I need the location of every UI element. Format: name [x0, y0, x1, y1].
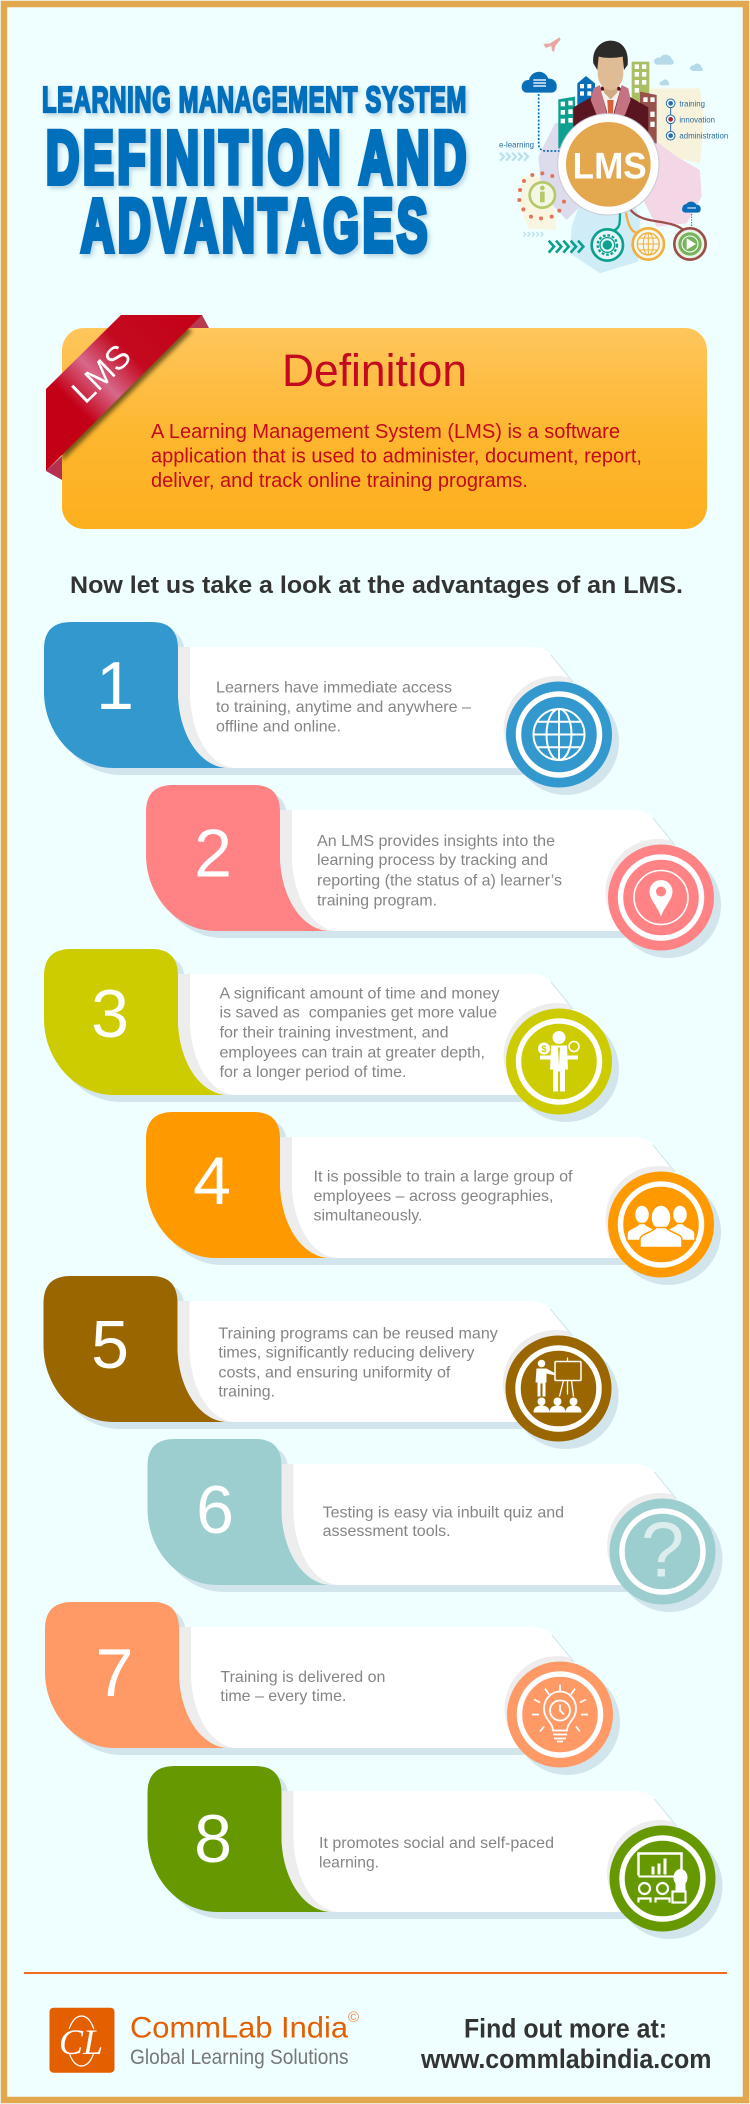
- text: [218, 1325, 498, 1401]
- card shape: [44, 622, 574, 775]
- number: 1: [96, 648, 134, 724]
- text: [323, 1504, 564, 1540]
- card shape: [148, 1439, 677, 1592]
- text: A significant amount of time and money: [220, 985, 500, 1002]
- card shape: [146, 1112, 676, 1265]
- panel: advantage 7: [45, 1602, 620, 1775]
- number: 3: [91, 976, 129, 1052]
- number: 2: [194, 816, 232, 892]
- call to action: Find out more at:: [464, 2014, 667, 2044]
- LMS badge: LMS: [573, 144, 647, 186]
- panel: advantage 6: [148, 1439, 722, 1612]
- number: 4: [193, 1143, 231, 1219]
- text: learning process by tracking and: [317, 852, 548, 869]
- card shape: [44, 949, 574, 1102]
- text: reporting (the status of a) learner’s: [317, 872, 562, 889]
- number: 7: [96, 1635, 134, 1711]
- footer divider: [24, 1972, 727, 1974]
- text: assessment tools.: [323, 1523, 451, 1540]
- icon: airplane: [543, 37, 561, 52]
- watercolor backdrop: [520, 88, 704, 273]
- panel: advantage 1: [44, 622, 619, 795]
- copyright: ©: [348, 2009, 359, 2026]
- logo mark: [50, 2008, 114, 2073]
- definition text: A Learning Management System (LMS) is a software: [151, 421, 620, 443]
- text: [216, 680, 471, 736]
- text: employees – across geographies,: [314, 1188, 554, 1205]
- text: costs, and ensuring uniformity of: [218, 1364, 451, 1381]
- icon: info with dotted ring: [517, 171, 566, 220]
- text: training.: [218, 1384, 275, 1401]
- buildings: [558, 62, 657, 148]
- icon: globe: [506, 682, 619, 795]
- panel: definition: [46, 315, 707, 529]
- text: to training, anytime and anywhere –: [216, 699, 471, 716]
- text: [314, 1169, 573, 1225]
- chevrons: [523, 232, 583, 253]
- connectors: [613, 210, 683, 233]
- LMS badge: [558, 114, 659, 215]
- title: DEFINITION AND: [46, 116, 470, 199]
- logo mark: CL: [59, 2022, 103, 2062]
- icon: gear circle: [592, 229, 623, 261]
- logo: CommLab India: [50, 2008, 359, 2073]
- list: training, innovation, administration: training: [679, 100, 705, 109]
- icon: globe circle: [633, 228, 664, 260]
- text: time – every time.: [220, 1688, 346, 1705]
- number: 6: [196, 1472, 234, 1548]
- number: 8: [194, 1801, 232, 1877]
- title: [42, 79, 470, 267]
- list: training, innovation, administration: innovation: [679, 115, 715, 124]
- icon: location pin: [608, 844, 721, 958]
- text: Learners have immediate access: [216, 680, 452, 697]
- icon: businessman balancing money and time: $: [541, 1044, 547, 1054]
- text: offline and online.: [216, 719, 341, 736]
- text: [319, 1835, 554, 1871]
- call to action: www.commlabindia.com: [420, 2044, 712, 2074]
- text: simultaneously.: [314, 1208, 422, 1225]
- icon: classroom with chart: [610, 1826, 722, 1939]
- text: An LMS provides insights into the: [317, 833, 555, 850]
- text: employees can train at greater depth,: [220, 1044, 485, 1061]
- text: Testing is easy via inbuilt quiz and: [323, 1504, 564, 1521]
- title: LEARNING MANAGEMENT SYSTEM: [42, 79, 467, 120]
- definition text: [151, 421, 642, 492]
- label: e-learning: e-learning: [499, 140, 534, 149]
- heading: Definition: [282, 345, 467, 396]
- tagline: Global Learning Solutions: [130, 2046, 348, 2069]
- panel: advantage 3: [44, 949, 619, 1122]
- panel: advantage 8: [148, 1766, 722, 1939]
- icon: play circle: [674, 228, 706, 260]
- ribbon shadow: [62, 326, 192, 461]
- panel: advantage 2: [146, 785, 721, 958]
- text: learning.: [319, 1854, 379, 1871]
- icon: light bulb with clock: [507, 1662, 620, 1775]
- card shape: [45, 1602, 574, 1755]
- hero illustration: LMS hub: [499, 37, 728, 273]
- definition box: [62, 328, 707, 529]
- icon: question mark: ?: [641, 1506, 684, 1594]
- text: Training programs can be reused many: [218, 1325, 498, 1342]
- text: [220, 985, 500, 1081]
- text: for their training investment, and: [220, 1024, 448, 1041]
- title: ADVANTAGES: [81, 184, 431, 267]
- icon: small cloud: [682, 202, 701, 227]
- label: e-learning: [499, 140, 534, 161]
- card shape: [44, 1276, 573, 1429]
- text: is saved as companies get more value: [220, 1004, 497, 1021]
- icon: question mark: [610, 1498, 722, 1612]
- text: [220, 1669, 385, 1705]
- icon: presenter with audience: [506, 1336, 618, 1449]
- text: Training is delivered on: [220, 1669, 385, 1686]
- call to action: [420, 2014, 712, 2074]
- text: [317, 833, 562, 909]
- definition text: application that is used to administer, document, report,: [151, 446, 642, 468]
- brand name: CommLab India: [130, 2012, 348, 2045]
- LMS ribbon: [46, 315, 209, 480]
- list: training, innovation, administration: administration: [679, 131, 728, 140]
- definition text: deliver, and track online training programs.: [151, 470, 528, 492]
- text: It promotes social and self-paced: [319, 1835, 554, 1852]
- text: for a longer period of time.: [220, 1064, 406, 1081]
- icon: group of people: [608, 1172, 721, 1285]
- card shape: [148, 1766, 677, 1919]
- number: 5: [91, 1307, 129, 1383]
- intro heading: Now let us take a look at the advantages of an LMS.: [70, 572, 683, 599]
- icon: cloud with dotted link: [522, 72, 559, 151]
- panel: advantage 4: [146, 1112, 721, 1285]
- text: times, significantly reducing delivery: [218, 1344, 474, 1361]
- text: It is possible to train a large group of: [314, 1169, 573, 1186]
- person: [573, 41, 648, 135]
- list: training, innovation, administration: [666, 99, 728, 140]
- icon: pale clouds: [654, 55, 703, 85]
- card shape: [146, 785, 676, 938]
- LMS ribbon: LMS: [64, 337, 138, 410]
- icon: businessman balancing money and time: [506, 1008, 619, 1122]
- panel: advantage 5: [44, 1276, 618, 1449]
- text: training program.: [317, 892, 437, 909]
